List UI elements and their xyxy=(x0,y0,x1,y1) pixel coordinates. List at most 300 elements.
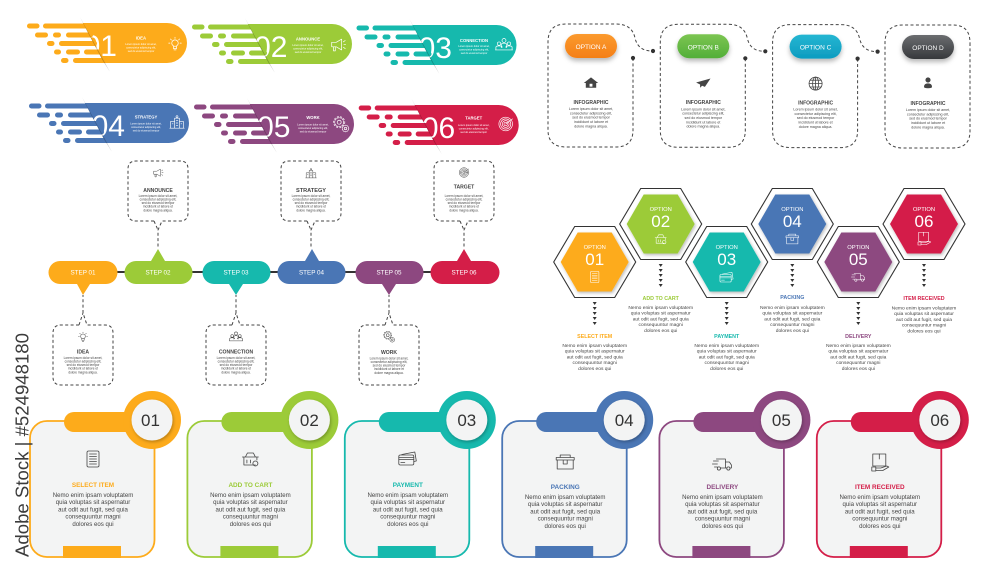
body text: aut odit aut fugit, sed quia xyxy=(373,506,443,513)
icon: megaphone xyxy=(332,39,346,51)
body text: consequuntur magni xyxy=(695,516,750,523)
number ring xyxy=(123,391,181,449)
number 02: 02 xyxy=(254,31,288,64)
body text xyxy=(826,343,891,372)
body text xyxy=(64,356,103,374)
banner 02 announce xyxy=(192,18,352,73)
body text: Nemo enim ipsam voluptatem xyxy=(826,343,891,349)
pill with pointer xyxy=(124,249,193,284)
banner 06 target xyxy=(359,99,519,154)
label: ADD TO CART xyxy=(643,296,680,302)
dashed outline with connector xyxy=(548,24,652,147)
card 02 xyxy=(187,391,338,558)
option label: OPTION xyxy=(913,207,935,213)
pill with pointer xyxy=(356,261,424,295)
label: PACKING xyxy=(780,295,804,301)
option label: OPTION xyxy=(847,245,869,251)
body text: consequuntur magni xyxy=(836,360,880,366)
body text xyxy=(210,492,291,528)
icon: bulb xyxy=(78,332,88,341)
hexagon option 02 xyxy=(620,188,702,334)
body text: aut odit aut fugit, sed quia xyxy=(216,506,286,513)
label: STEP 03 xyxy=(223,270,249,276)
body text: dolores eos qui xyxy=(710,366,743,372)
label: SELECT ITEM xyxy=(577,334,613,340)
body text: incididunt ut labore et xyxy=(68,367,98,371)
body text: dolore magna aliqua. xyxy=(449,208,479,212)
body text: quia voluptas sit aspernatur xyxy=(631,311,691,317)
icon: globe xyxy=(809,77,822,90)
number ring xyxy=(280,391,338,449)
body text: dolore magna aliqua. xyxy=(687,125,720,129)
heading: ANNOUNCE xyxy=(143,188,173,194)
body text: sed do eiusmod tempor xyxy=(295,50,321,54)
body text: Nemo enim ipsam voluptatem xyxy=(210,492,291,499)
banner 03 connection xyxy=(356,19,516,74)
heading: CONNECTION xyxy=(460,38,488,43)
card frame xyxy=(345,421,469,557)
speed bars xyxy=(27,24,107,63)
body text xyxy=(562,343,627,372)
body text: consequuntur magni xyxy=(902,323,946,329)
body text: Lorem ipsum dolor sit amet, xyxy=(906,108,950,112)
card frame xyxy=(817,421,941,557)
body text xyxy=(682,494,763,530)
number: 04 xyxy=(783,212,802,231)
body text xyxy=(569,107,613,128)
number: 01 xyxy=(585,250,604,269)
body text xyxy=(628,305,693,334)
diagonal shadow xyxy=(245,18,275,73)
heading: INFOGRAPHIC xyxy=(574,100,609,106)
body text: Lorem ipsum dolor sit amet, xyxy=(370,356,409,360)
card 03 xyxy=(345,391,496,558)
icon: paper plane xyxy=(696,78,710,88)
icon: truck xyxy=(851,274,865,281)
arrow stack xyxy=(593,302,597,325)
body text: Nemo enim ipsam voluptatem xyxy=(694,343,759,349)
body text: consequuntur magni xyxy=(538,516,593,523)
body text: Lorem ipsum dolor sit amet, xyxy=(297,122,329,126)
heading: INFOGRAPHIC xyxy=(910,101,946,107)
card frame xyxy=(187,421,312,557)
callout: work xyxy=(359,295,419,385)
icon: gears xyxy=(334,117,349,132)
bottom tab xyxy=(692,546,750,558)
number: 02 xyxy=(300,411,319,430)
icon: strategy xyxy=(306,168,316,178)
body text: consectetur adipiscing elit, xyxy=(570,111,612,115)
body text: consequuntur magni xyxy=(65,514,121,521)
body text: dolores eos qui xyxy=(387,521,428,528)
number 03: 03 xyxy=(419,32,452,65)
dashed outline with connector xyxy=(660,24,764,147)
hexagon option 05 xyxy=(817,226,899,372)
body text: Lorem ipsum dolor sit amet, xyxy=(793,108,838,112)
hexagon option 01 xyxy=(554,226,636,372)
body text: sed do eiusmod tempor xyxy=(685,116,723,120)
body text: Lorem ipsum dolor sit amet, xyxy=(445,194,484,198)
body text: aut odit aut fugit, sed quia xyxy=(845,508,915,515)
speed bars xyxy=(192,24,272,64)
body text: sed do eiusmod tempor xyxy=(460,130,487,134)
label: ADD TO CART xyxy=(228,482,272,489)
label: STEP 05 xyxy=(376,270,402,276)
step 04 xyxy=(278,249,346,284)
body text: Lorem ipsum dolor sit amet, xyxy=(139,194,178,198)
number ring xyxy=(911,391,969,449)
dashed box xyxy=(206,295,266,385)
body text: aut odit aut fugit, sed quia xyxy=(830,354,887,360)
number 06: 06 xyxy=(422,112,455,145)
body text: aut odit aut fugit, sed quia xyxy=(896,317,952,323)
number: 03 xyxy=(457,411,476,430)
body text xyxy=(130,122,162,133)
body text xyxy=(292,43,324,54)
body text: incididunt ut labore et xyxy=(686,120,720,124)
body text: aut odit aut fugit, sed quia xyxy=(58,506,129,513)
body text: dolore magna aliqua. xyxy=(296,208,326,212)
card frame xyxy=(502,421,627,557)
card 04 xyxy=(502,391,653,558)
callout: strategy xyxy=(281,161,341,249)
body text: quia voluptas sit aspernatur xyxy=(685,501,760,508)
body text: consequuntur magni xyxy=(380,514,435,521)
body text: incididunt ut labore et xyxy=(374,367,404,371)
body text: Lorem ipsum dolor sit amet, xyxy=(292,43,324,47)
body text: dolores eos qui xyxy=(776,328,809,334)
body text: aut odit aut fugit, sed quia xyxy=(699,354,755,360)
body text: sed do eiusmod tempor xyxy=(133,129,159,133)
bottom tab xyxy=(63,546,121,558)
step 06 xyxy=(430,249,500,284)
body text: consectetur adipiscing elit, xyxy=(218,359,255,363)
speed bars xyxy=(29,104,109,143)
body text xyxy=(892,305,956,334)
pill label: OPTION B xyxy=(688,44,719,51)
icon: basket xyxy=(242,453,258,466)
number ring xyxy=(752,391,810,449)
body text: sed do eiusmod tempor xyxy=(67,363,99,367)
heading: CONNECTION xyxy=(219,350,253,356)
body text xyxy=(458,44,490,55)
body text: dolore magna aliqua. xyxy=(911,125,945,129)
header bar xyxy=(536,412,624,432)
header bar xyxy=(693,412,781,432)
label: STEP 04 xyxy=(299,270,325,276)
callout: connection xyxy=(206,295,266,385)
speed bars xyxy=(194,104,274,144)
dashed box xyxy=(359,295,419,385)
body text: dolores eos qui xyxy=(907,328,941,334)
body text: consectetur adipiscing elit, xyxy=(293,197,330,201)
pill: option D xyxy=(902,35,954,59)
option label: OPTION xyxy=(650,207,672,213)
connector dots xyxy=(856,50,880,61)
pill label: OPTION C xyxy=(800,45,832,52)
pill: option A xyxy=(565,34,617,58)
body text xyxy=(292,194,331,212)
body text: dolore magna aliqua. xyxy=(799,125,832,129)
heading: WORK xyxy=(381,350,397,356)
inner hexagon xyxy=(890,194,958,254)
body text: dolores eos qui xyxy=(644,328,677,334)
heading: IDEA xyxy=(77,350,89,356)
card 05 xyxy=(659,391,810,558)
icon: team xyxy=(495,39,513,50)
body text: consequuntur magni xyxy=(573,360,617,366)
heading: TARGET xyxy=(465,116,483,120)
label: DELIVERY xyxy=(845,334,872,340)
body text: quia voluptas sit aspernatur xyxy=(213,499,288,506)
heading: STRATEGY xyxy=(296,188,326,194)
body text xyxy=(760,305,825,334)
pill with pointer xyxy=(202,261,270,295)
pill: option B xyxy=(677,34,729,58)
outer hexagon xyxy=(686,226,768,298)
number disc xyxy=(919,400,960,440)
dashed outline xyxy=(885,25,970,148)
body text: Nemo enim ipsam voluptatem xyxy=(367,492,448,499)
header bar xyxy=(851,412,939,432)
body text: incididunt ut labore et xyxy=(296,205,326,209)
body text: dolores eos qui xyxy=(72,521,114,528)
number ring xyxy=(595,391,653,449)
outer hexagon xyxy=(554,226,636,298)
number: 03 xyxy=(717,250,736,269)
number: 05 xyxy=(849,250,868,269)
body text: sed do eiusmod tempor xyxy=(300,130,326,134)
icon: target xyxy=(459,168,469,177)
banner 01 idea xyxy=(27,17,187,72)
body text: sed do eiusmod tempor xyxy=(220,363,252,367)
body text: Lorem ipsum dolor sit amet, xyxy=(458,44,490,48)
icon: strategy xyxy=(170,116,184,128)
dashed outline with connector xyxy=(773,25,877,148)
pill with pointer xyxy=(278,249,346,284)
body text: Lorem ipsum dolor sit amet, xyxy=(569,107,613,111)
body text: incididunt ut labore et xyxy=(143,205,173,209)
hexagon option 04 xyxy=(751,188,833,334)
body text: dolores eos qui xyxy=(859,523,900,530)
body text: consectetur adipiscing elit, xyxy=(459,48,489,52)
arrow stack xyxy=(856,302,860,325)
arrow stack xyxy=(922,264,926,287)
body text: Nemo enim ipsam voluptatem xyxy=(525,494,606,501)
body text: Lorem ipsum dolor sit amet, xyxy=(458,123,490,127)
label: PAYMENT xyxy=(714,334,740,340)
body text: Nemo enim ipsam voluptatem xyxy=(682,494,763,501)
body text: quia voluptas sit aspernatur xyxy=(894,311,954,317)
number disc xyxy=(289,400,330,440)
body text: consectetur adipiscing elit, xyxy=(907,112,949,116)
body text xyxy=(53,492,133,528)
body text: aut odit aut fugit, sed quia xyxy=(633,316,689,322)
label: PAYMENT xyxy=(393,482,423,489)
body text: aut odit aut fugit, sed quia xyxy=(530,508,601,515)
body text: incididunt ut labore et xyxy=(799,121,833,125)
body text: consequuntur magni xyxy=(639,322,683,328)
body text: aut odit aut fugit, sed quia xyxy=(567,354,623,360)
timeline connector line xyxy=(110,271,440,273)
body text xyxy=(793,108,838,129)
bottom tab xyxy=(378,546,436,558)
body text: consectetur adipiscing elit, xyxy=(65,359,102,363)
body text: Nemo enim ipsam voluptatem xyxy=(628,305,693,311)
step 02 xyxy=(124,249,193,284)
number 04: 04 xyxy=(92,110,125,143)
banner body xyxy=(85,103,189,143)
label: SELECT ITEM xyxy=(72,482,114,489)
diagonal shadow xyxy=(412,99,442,154)
body text: Lorem ipsum dolor sit amet, xyxy=(130,122,162,126)
body text: consequuntur magni xyxy=(770,322,814,328)
dashed box xyxy=(53,295,113,385)
number 05: 05 xyxy=(257,111,290,144)
body text: consectetur adipiscing elit, xyxy=(682,112,724,116)
inner hexagon xyxy=(627,194,695,254)
body text: Lorem ipsum dolor sit amet, xyxy=(292,194,331,198)
body text: quia voluptas sit aspernatur xyxy=(843,501,917,508)
banner 05 work xyxy=(194,98,354,153)
body text: Lorem ipsum dolor sit amet, xyxy=(681,107,725,111)
label: STEP 01 xyxy=(70,270,96,276)
outer hexagon xyxy=(620,188,702,260)
body text: incididunt ut labore et xyxy=(221,367,251,371)
heading: STRATEGY xyxy=(135,114,157,120)
option label: OPTION xyxy=(716,245,738,251)
label: STEP 06 xyxy=(451,270,477,276)
diagonal shadow xyxy=(410,19,440,74)
body text: Nemo enim ipsam voluptatem xyxy=(562,343,627,349)
body text: dolore magna aliqua. xyxy=(68,370,98,374)
header bar xyxy=(221,412,309,432)
body text: consectetur adipiscing elit, xyxy=(140,197,177,201)
icon: bulb xyxy=(169,37,181,50)
icon: box xyxy=(556,455,574,469)
heading: INFOGRAPHIC xyxy=(686,100,721,106)
icon: megaphone xyxy=(154,169,163,177)
body text xyxy=(445,194,484,212)
body text: dolore magna aliqua. xyxy=(574,124,608,128)
inner hexagon xyxy=(824,232,892,292)
body text: consectetur adipiscing elit, xyxy=(446,197,483,201)
body text: aut odit aut fugit, sed quia xyxy=(688,508,758,515)
heading: TARGET xyxy=(454,184,475,190)
body text: sed do eiusmod tempor xyxy=(142,201,174,205)
icon: list xyxy=(590,271,599,283)
heading: ANNOUNCE xyxy=(296,36,320,42)
inner hexagon xyxy=(693,232,761,292)
body text: dolores eos qui xyxy=(230,521,271,528)
body text: aut odit aut fugit, sed quia xyxy=(764,316,821,322)
outer hexagon xyxy=(751,188,833,260)
dashed box xyxy=(434,161,494,249)
diagonal shadow xyxy=(247,98,277,153)
card 06 xyxy=(817,391,969,558)
icon: target xyxy=(499,117,512,131)
step 01 xyxy=(49,261,118,295)
body text: incididunt ut labore et xyxy=(911,121,945,125)
body text xyxy=(125,42,157,53)
dashed box xyxy=(128,161,188,249)
number: 06 xyxy=(915,212,933,231)
body text: sed do eiusmod tempor xyxy=(448,201,480,205)
body text: consectetur adipiscing elit, xyxy=(371,360,408,364)
body text: Nemo enim ipsam voluptatem xyxy=(839,494,920,501)
callout: target xyxy=(434,161,494,249)
banner body xyxy=(415,105,519,145)
body text: Lorem ipsum dolor sit amet, xyxy=(125,42,157,46)
body text: Nemo enim ipsam voluptatem xyxy=(53,492,133,499)
body text: consectetur adipiscing elit, xyxy=(131,125,161,129)
stock id text: Adobe Stock | #524948180 xyxy=(12,333,32,557)
banner body xyxy=(83,23,187,63)
body text xyxy=(367,492,448,528)
callout: announce xyxy=(128,161,188,249)
body text: dolore magna aliqua. xyxy=(221,370,251,374)
number: 04 xyxy=(615,411,634,430)
card frame xyxy=(30,421,154,557)
banner body xyxy=(248,24,352,64)
body text xyxy=(525,494,606,530)
body text: dolores eos qui xyxy=(702,523,743,530)
step 03 xyxy=(202,261,270,295)
body text: incididunt ut labore et xyxy=(574,120,608,124)
icon: basket xyxy=(655,235,666,244)
body text: dolores eos qui xyxy=(842,366,875,372)
icon: truck xyxy=(712,459,731,470)
body text: sed do eiusmod tempor xyxy=(909,117,948,121)
inner hexagon xyxy=(561,232,629,292)
pill label: OPTION D xyxy=(912,45,944,52)
body text: incididunt ut labore et xyxy=(449,205,479,209)
number disc xyxy=(604,400,645,440)
hexagon option 06 xyxy=(883,188,965,334)
number: 02 xyxy=(651,212,670,231)
dashed box xyxy=(281,161,341,249)
option C panel xyxy=(773,25,880,148)
pill label: OPTION A xyxy=(576,44,607,51)
header bar xyxy=(379,412,467,432)
icon: received parcel xyxy=(918,232,931,245)
number: 06 xyxy=(930,411,949,430)
body text: sed do eiusmod tempor xyxy=(128,49,154,53)
banner body xyxy=(250,104,354,144)
option D panel xyxy=(885,25,970,148)
number disc xyxy=(761,400,802,440)
label: PACKING xyxy=(551,484,580,491)
number: 01 xyxy=(141,411,160,430)
body text xyxy=(217,356,256,374)
icon: list xyxy=(87,451,99,467)
body text xyxy=(906,108,950,129)
body text: dolore magna aliqua. xyxy=(374,371,404,375)
icon: team xyxy=(229,332,243,341)
banner body xyxy=(412,25,516,65)
body text: Lorem ipsum dolor sit amet, xyxy=(64,356,103,360)
option label: OPTION xyxy=(781,207,803,213)
outer hexagon xyxy=(883,188,965,260)
body text: sed do eiusmod tempor xyxy=(373,364,405,368)
heading: WORK xyxy=(306,115,320,120)
body text: dolores eos qui xyxy=(578,366,611,372)
icon: user xyxy=(924,77,932,88)
body text: Lorem ipsum dolor sit amet, xyxy=(217,356,256,360)
body text xyxy=(839,494,920,530)
bottom tab xyxy=(220,546,278,558)
body text xyxy=(297,122,329,134)
